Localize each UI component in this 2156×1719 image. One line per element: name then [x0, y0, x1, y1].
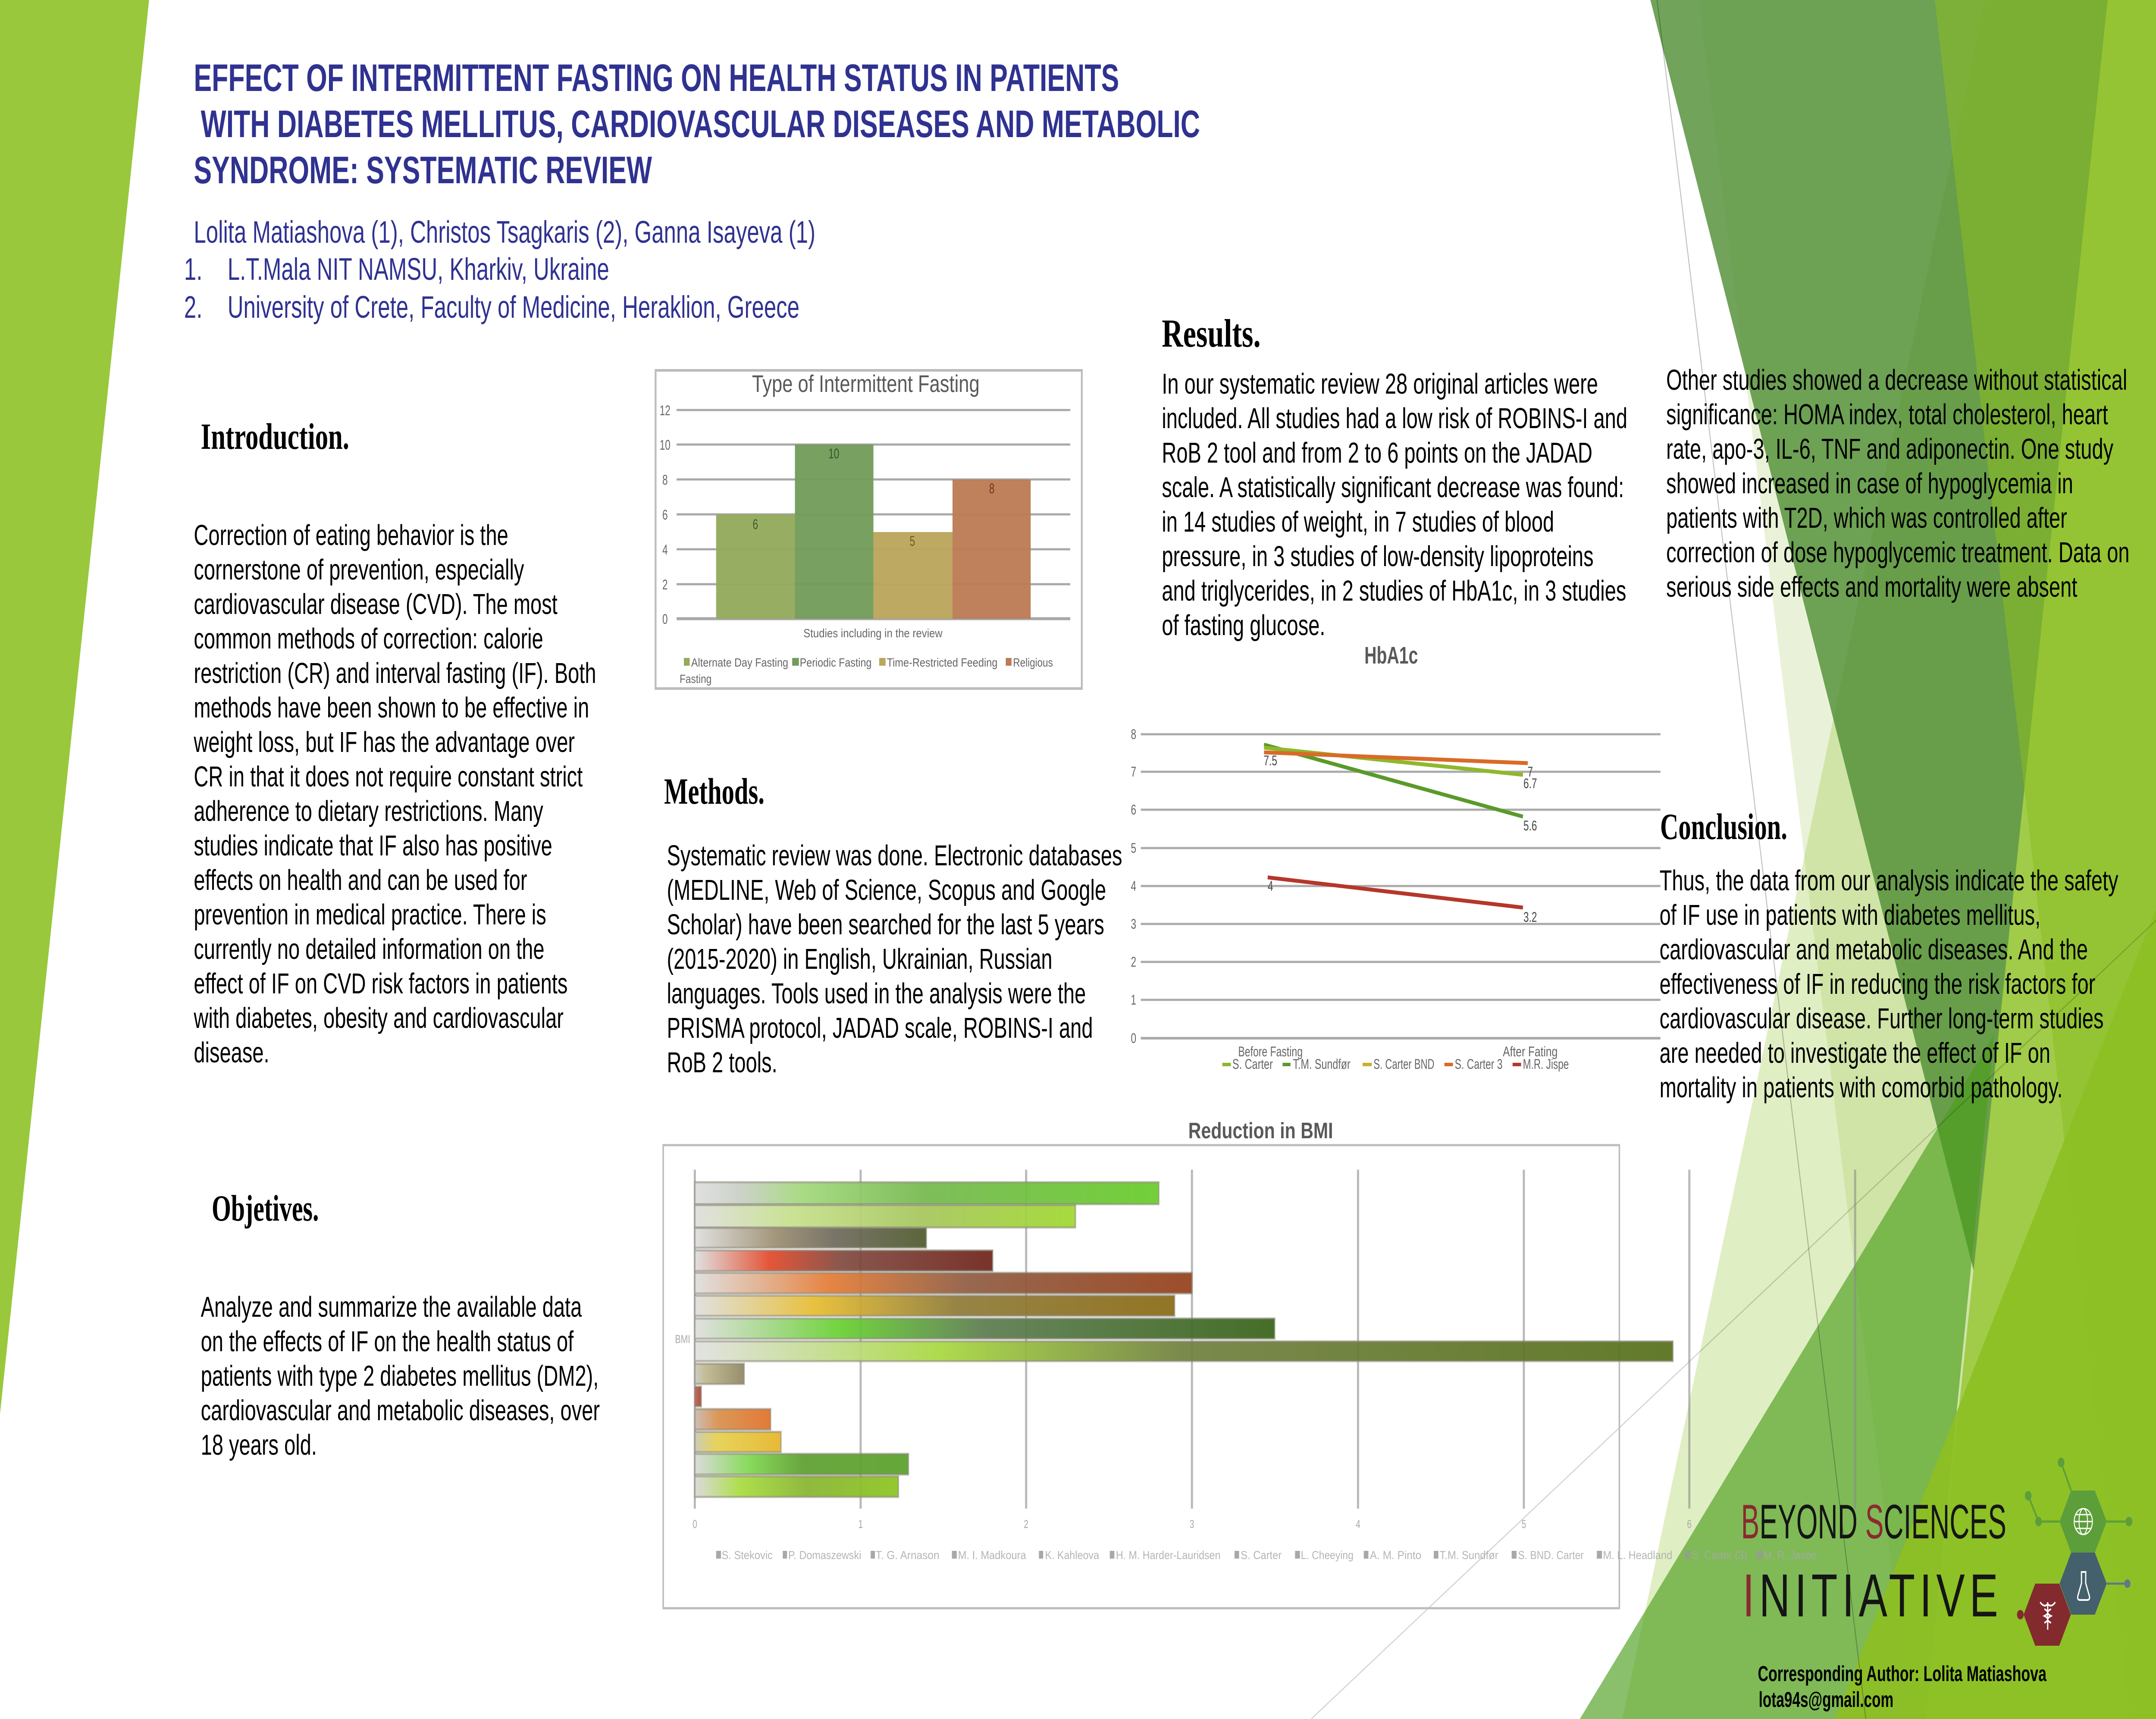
heading: results: Results. — [1162, 312, 1261, 356]
bar chart: Reduction in BMI: BMI — [675, 1333, 690, 1346]
text: introduction: disease. — [194, 1037, 270, 1069]
bars: BMI reduction per study — [695, 1182, 1673, 1497]
legend: BMI studies: M. L. Headland — [1603, 1549, 1672, 1562]
text: introduction: currently no detailed information on the — [194, 933, 544, 965]
data labels: 7.5 — [1264, 753, 1277, 768]
bar chart: Type of Intermittent Fasting: 6 — [662, 507, 668, 523]
legend: BMI studies: P. Domaszewski — [788, 1549, 861, 1562]
text: results: included. All studies had a low risk of ROBINS-I and — [1162, 403, 1627, 435]
text: introduction: cardiovascular disease (CVD). The most — [194, 589, 558, 620]
bar chart: Reduction in BMI: 2 — [1024, 1518, 1028, 1531]
legend: BMI studies: M. I. Madkoura — [958, 1549, 1026, 1562]
text: results: scale. A statistically significant decrease was found: — [1162, 472, 1624, 504]
bar chart: Reduction in BMI: 1 — [859, 1518, 863, 1531]
text: methods: (MEDLINE, Web of Science, Scopus and Google — [667, 874, 1106, 906]
text: introduction — [194, 520, 596, 1069]
legend: BMI studies: L. Cheeying — [1301, 1549, 1354, 1562]
text: introduction: cornerstone of prevention, especially — [194, 554, 524, 586]
legend: HbA1c studies: S. Carter 3 — [1455, 1056, 1503, 1072]
bar chart: Type of Intermittent Fasting — [655, 370, 1082, 689]
text: other studies: serious side effects and mortality were absent — [1666, 571, 2077, 603]
text: introduction: effects on health and can be used for — [194, 864, 527, 896]
data labels: 3.2 — [1523, 909, 1537, 925]
bar chart: Reduction in BMI: 0 — [693, 1518, 697, 1531]
text: other studies: Other studies showed a decrease without statistical — [1666, 364, 2127, 396]
text: introduction: CR in that it does not require constant strict — [194, 761, 583, 793]
bar chart: Type of Intermittent Fasting: 2 — [662, 577, 668, 592]
icon: globe hexagon — [2059, 1490, 2107, 1553]
text: other studies: patients with T2D, which was controlled after — [1666, 502, 2067, 534]
text: results: in 14 studies of weight, in 7 studies of blood — [1162, 506, 1554, 538]
legend: BMI studies: T. G. Arnason — [875, 1549, 940, 1562]
bar chart: Type of Intermittent Fasting: 12 — [660, 403, 671, 418]
text: introduction: adherence to dietary restrictions. Many — [194, 795, 543, 827]
text: introduction: prevention in medical practice. There is — [194, 899, 546, 931]
legend: BMI studies — [716, 1549, 1817, 1562]
data lines: before and after fasting — [1264, 745, 1528, 908]
text: results: RoB 2 tool and from 2 to 6 points on the JADAD — [1162, 437, 1592, 469]
text: introduction: common methods of correction: calorie — [194, 623, 543, 655]
bar chart: Reduction in BMI: 5 — [1522, 1518, 1526, 1531]
title: WITH DIABETES MELLITUS, CARDIOVASCULAR DISEASES AND METABOLIC — [201, 103, 1200, 146]
bar chart: Reduction in BMI — [663, 1118, 1858, 1608]
legend: HbA1c studies: S. Carter BND — [1373, 1056, 1435, 1072]
bar chart: Type of Intermittent Fasting: Studies including in the review — [803, 627, 943, 640]
text: objectives: patients with type 2 diabetes mellitus (DM2), — [201, 1360, 599, 1392]
bars: studies per fasting type — [716, 445, 1031, 619]
affiliations: University of Crete, Faculty of Medicine, Heraklion, Greece — [228, 290, 799, 325]
affiliations: 2. — [184, 290, 202, 325]
line chart: HbA1c: 6 — [1131, 802, 1136, 817]
legend: BMI studies: S. Stekovic — [721, 1549, 773, 1562]
line chart: HbA1c: 3 — [1131, 916, 1136, 932]
bar chart: Type of Intermittent Fasting: 10 — [660, 437, 671, 453]
legend: BMI studies: S. Carter — [1241, 1549, 1282, 1562]
logo wordmark: INITIATIVE — [1742, 1562, 1998, 1629]
bar chart: Type of Intermittent Fasting: 4 — [662, 542, 668, 557]
text: results: and triglycerides, in 2 studies of HbA1c, in 3 studies — [1162, 575, 1626, 607]
bar chart: Reduction in BMI: 6 — [1687, 1518, 1692, 1531]
icon: flask hexagon — [2059, 1553, 2107, 1615]
text: methods: Systematic review was done. Electronic databases — [667, 840, 1122, 872]
text: other studies — [1666, 364, 2130, 603]
text: introduction: Correction of eating behavior is the — [194, 520, 508, 551]
legend: fasting types: Periodic Fasting — [800, 656, 871, 670]
corresponding author: lota94s@gmail.com — [1759, 1688, 1893, 1712]
legend: HbA1c studies — [1222, 1056, 1569, 1072]
text: objectives: Analyze and summarize the available data — [201, 1291, 582, 1323]
heading: objectives: Objetives. — [212, 1188, 319, 1229]
text: introduction: effect of IF on CVD risk factors in patients — [194, 968, 567, 1000]
text: methods: (2015-2020) in English, Ukrainian, Russian — [667, 943, 1053, 975]
bar chart: Type of Intermittent Fasting: 5 — [910, 533, 915, 549]
legend: BMI studies: T.M. Sundfør — [1440, 1549, 1498, 1562]
text: results — [1162, 368, 1627, 642]
text: other studies: significance: HOMA index, total cholesterol, heart — [1666, 399, 2108, 431]
chart title: type of fasting: Type of Intermittent Fasting — [752, 370, 980, 398]
heading: conclusion: Conclusion. — [1660, 807, 1787, 848]
text: conclusion: cardiovascular and metabolic diseases. And the — [1660, 934, 2088, 966]
text: methods: languages. Tools used in the analysis were the — [667, 978, 1086, 1010]
bar chart: Type of Intermittent Fasting: 10 — [828, 446, 839, 461]
bar chart: Type of Intermittent Fasting: 0 — [662, 611, 668, 627]
text: introduction: studies indicate that IF also has positive — [194, 830, 552, 862]
chart title: HbA1c: HbA1c — [1364, 642, 1418, 669]
legend: fasting types: Fasting — [680, 673, 711, 686]
title — [194, 57, 1200, 192]
text: other studies: rate, apo-3, IL-6, TNF and adiponectin. One study — [1666, 433, 2113, 465]
text: objectives — [201, 1291, 600, 1461]
legend: BMI studies: A. M. Pinto — [1370, 1549, 1421, 1562]
text: conclusion: mortality in patients with comorbid pathology. — [1660, 1072, 2063, 1104]
right faceted green background — [1311, 0, 2156, 1719]
data labels: 6.7 — [1523, 776, 1537, 791]
text: results: pressure, in 3 studies of low-density lipoproteins — [1162, 541, 1594, 573]
corresponding author — [1758, 1662, 2047, 1712]
text: introduction: weight loss, but IF has the advantage over — [194, 726, 575, 758]
text: conclusion: Thus, the data from our analysis indicate the safety — [1660, 865, 2118, 897]
logo wordmark — [1741, 1494, 2006, 1629]
text: methods: PRISMA protocol, JADAD scale, ROBINS-I and — [667, 1012, 1093, 1044]
bar chart: Type of Intermittent Fasting: 6 — [753, 517, 758, 532]
text: introduction: methods have been shown to be effective in — [194, 692, 589, 724]
text: conclusion — [1660, 865, 2118, 1104]
text: methods — [667, 840, 1122, 1079]
legend: fasting types: Alternate Day Fasting — [691, 656, 788, 670]
line chart: HbA1c: 4 — [1131, 878, 1136, 894]
text: conclusion: are needed to investigate the effect of IF on — [1660, 1037, 2050, 1069]
legend: BMI studies: M. R. Jaspe — [1764, 1549, 1817, 1562]
text: methods: Scholar) have been searched for the last 5 years — [667, 909, 1104, 941]
icon: caduceus hexagon — [2024, 1584, 2071, 1646]
legend: fasting types: Religious — [1013, 656, 1053, 670]
legend: HbA1c studies: T.M. Sundfør — [1293, 1056, 1351, 1072]
legend: BMI studies: H. M. Harder-Lauridsen — [1116, 1549, 1221, 1562]
data labels: 4 — [1268, 878, 1273, 894]
line chart: HbA1c: Before Fasting — [1238, 1044, 1303, 1059]
authors: Lolita Matiashova (1), Christos Tsagkaris (2), Ganna Isayeva (1) — [194, 215, 815, 250]
line chart: HbA1c — [1131, 642, 1661, 1072]
logo: Beyond Sciences Initiative — [1741, 1458, 2132, 1646]
line chart: HbA1c: 0 — [1131, 1030, 1136, 1046]
line chart: HbA1c: 5 — [1131, 840, 1136, 856]
data labels: 5.6 — [1523, 818, 1537, 833]
line chart: HbA1c: 1 — [1131, 992, 1136, 1008]
legend: HbA1c studies: S. Carter — [1232, 1056, 1273, 1072]
legend: fasting types — [680, 656, 1053, 686]
legend: BMI studies: S. BND. Carter — [1518, 1549, 1584, 1562]
text: conclusion: of IF use in patients with diabetes mellitus, — [1660, 899, 2040, 931]
text: objectives: on the effects of IF on the health status of — [201, 1326, 574, 1358]
text: conclusion: cardiovascular disease. Further long-term studies — [1660, 1003, 2104, 1035]
text: other studies: showed increased in case of hypoglycemia in — [1666, 468, 2073, 500]
left green triangle decoration — [0, 0, 149, 1414]
heading: introduction: Introduction. — [201, 416, 349, 457]
data labels — [1264, 753, 1537, 925]
line chart: HbA1c: 2 — [1131, 954, 1136, 970]
chart title: reduction in BMI: Reduction in BMI — [1188, 1118, 1333, 1143]
text: other studies: correction of dose hypoglycemic treatment. Data on — [1666, 537, 2130, 569]
title: EFFECT OF INTERMITTENT FASTING ON HEALTH STATUS IN PATIENTS — [194, 57, 1119, 100]
bar chart: Reduction in BMI: 7 — [1853, 1518, 1858, 1531]
line chart: HbA1c: After Fating — [1503, 1044, 1557, 1059]
text: results: In our systematic review 28 original articles were — [1162, 368, 1598, 400]
logo wordmark: BEYOND SCIENCES — [1741, 1494, 2006, 1549]
text: results: of fasting glucose. — [1162, 610, 1325, 642]
affiliations: 1. — [184, 252, 202, 287]
bar chart: Reduction in BMI: 3 — [1190, 1518, 1194, 1531]
corresponding author: Corresponding Author: Lolita Matiashova — [1758, 1662, 2047, 1686]
data labels: 7 — [1527, 764, 1533, 780]
text: objectives: 18 years old. — [201, 1429, 317, 1461]
text: methods: RoB 2 tools. — [667, 1047, 777, 1079]
legend: HbA1c studies: M.R. Jispe — [1523, 1056, 1569, 1072]
title: SYNDROME: SYSTEMATIC REVIEW — [194, 149, 652, 192]
text: objectives: cardiovascular and metabolic diseases, over — [201, 1395, 600, 1427]
legend: BMI studies: K. Kahleova — [1045, 1549, 1099, 1562]
text: introduction: restriction (CR) and interval fasting (IF). Both — [194, 658, 596, 689]
legend: fasting types: Time-Restricted Feeding — [887, 656, 997, 670]
affiliations — [184, 252, 799, 325]
affiliations: L.T.Mala NIT NAMSU, Kharkiv, Ukraine — [228, 252, 609, 287]
line chart: HbA1c: 8 — [1131, 726, 1136, 742]
heading: methods: Methods. — [664, 771, 765, 812]
text: conclusion: effectiveness of IF in reducing the risk factors for — [1660, 968, 2095, 1000]
line chart: HbA1c: 7 — [1131, 764, 1136, 780]
bar chart: Type of Intermittent Fasting: 8 — [989, 481, 994, 496]
legend: BMI studies: S. Carter (3) — [1692, 1549, 1747, 1562]
bar chart: Reduction in BMI: 4 — [1356, 1518, 1360, 1531]
text: introduction: with diabetes, obesity and cardiovascular — [194, 1002, 564, 1034]
bar chart: Type of Intermittent Fasting: 8 — [662, 472, 668, 488]
